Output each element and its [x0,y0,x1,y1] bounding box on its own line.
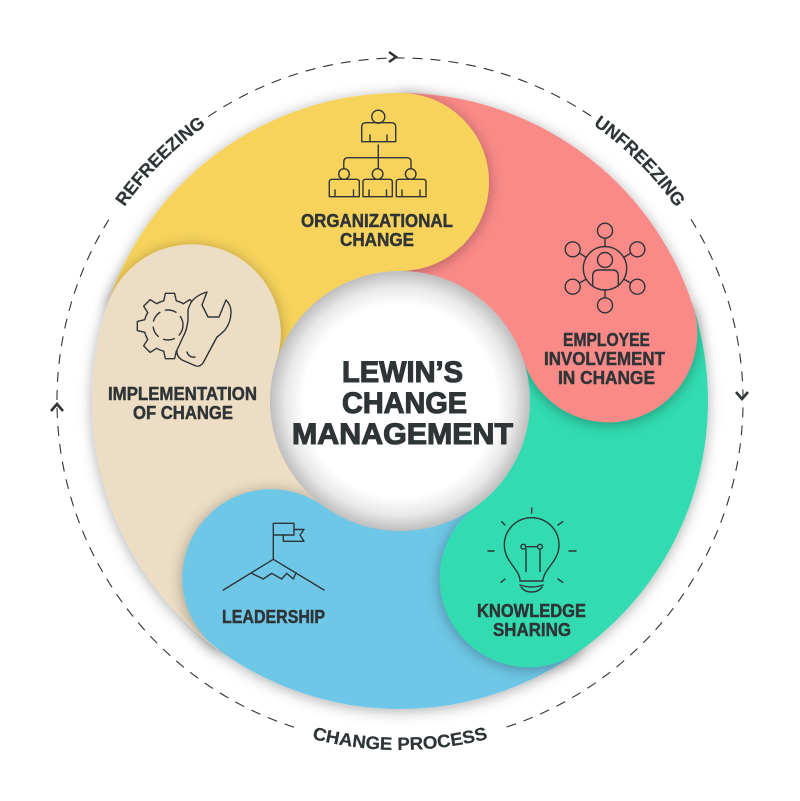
arrow: right [736,392,748,399]
segment: leadership head [174,484,419,654]
arrow: top [389,52,396,62]
label: organizational change: ORGANIZATIONAL [301,211,453,231]
segment: knowledge sharing [352,261,800,702]
label: organizational change: CHANGE [340,230,414,250]
icon: employee network [565,223,645,313]
icon: light bulb [488,508,576,592]
label: knowledge sharing: KNOWLEDGE [477,601,586,621]
centre circle [270,271,530,531]
label: employee involvement in change: IN CHANGE [558,368,655,388]
label: implementation of change: IMPLEMENTATION [108,384,257,404]
dashed process ring [57,58,743,727]
label: implementation of change: OF CHANGE [133,403,233,423]
title: LEWIN’S [342,356,463,389]
icon: flag on mountain [223,523,324,590]
arrow: left [51,404,63,411]
ring label: unfreezing: UNFREEZING [596,115,684,206]
label: employee involvement in change: INVOLVEMENT [544,349,665,369]
label: implementation of change [108,384,257,423]
label: leadership: LEADERSHIP [222,607,325,627]
icon: gear and wrench [137,292,231,366]
title [292,356,513,451]
label: employee involvement in change [544,330,665,388]
title: MANAGEMENT [292,418,513,451]
icon: organisation chart [329,110,426,197]
ring label: change process: CHANGE PROCESS [314,728,487,750]
segment: leadership base [147,381,613,801]
title: CHANGE [342,387,467,420]
segment: organizational change [107,93,489,361]
segment: implementation of change [17,221,389,667]
label: knowledge sharing: SHARING [493,620,571,640]
ring label: refreezing: REFREEZING [115,118,204,206]
segment: employee involvement [348,27,720,473]
label: knowledge sharing [477,601,586,640]
label: employee involvement in change: EMPLOYEE [563,330,650,350]
label: organizational change [301,211,453,250]
